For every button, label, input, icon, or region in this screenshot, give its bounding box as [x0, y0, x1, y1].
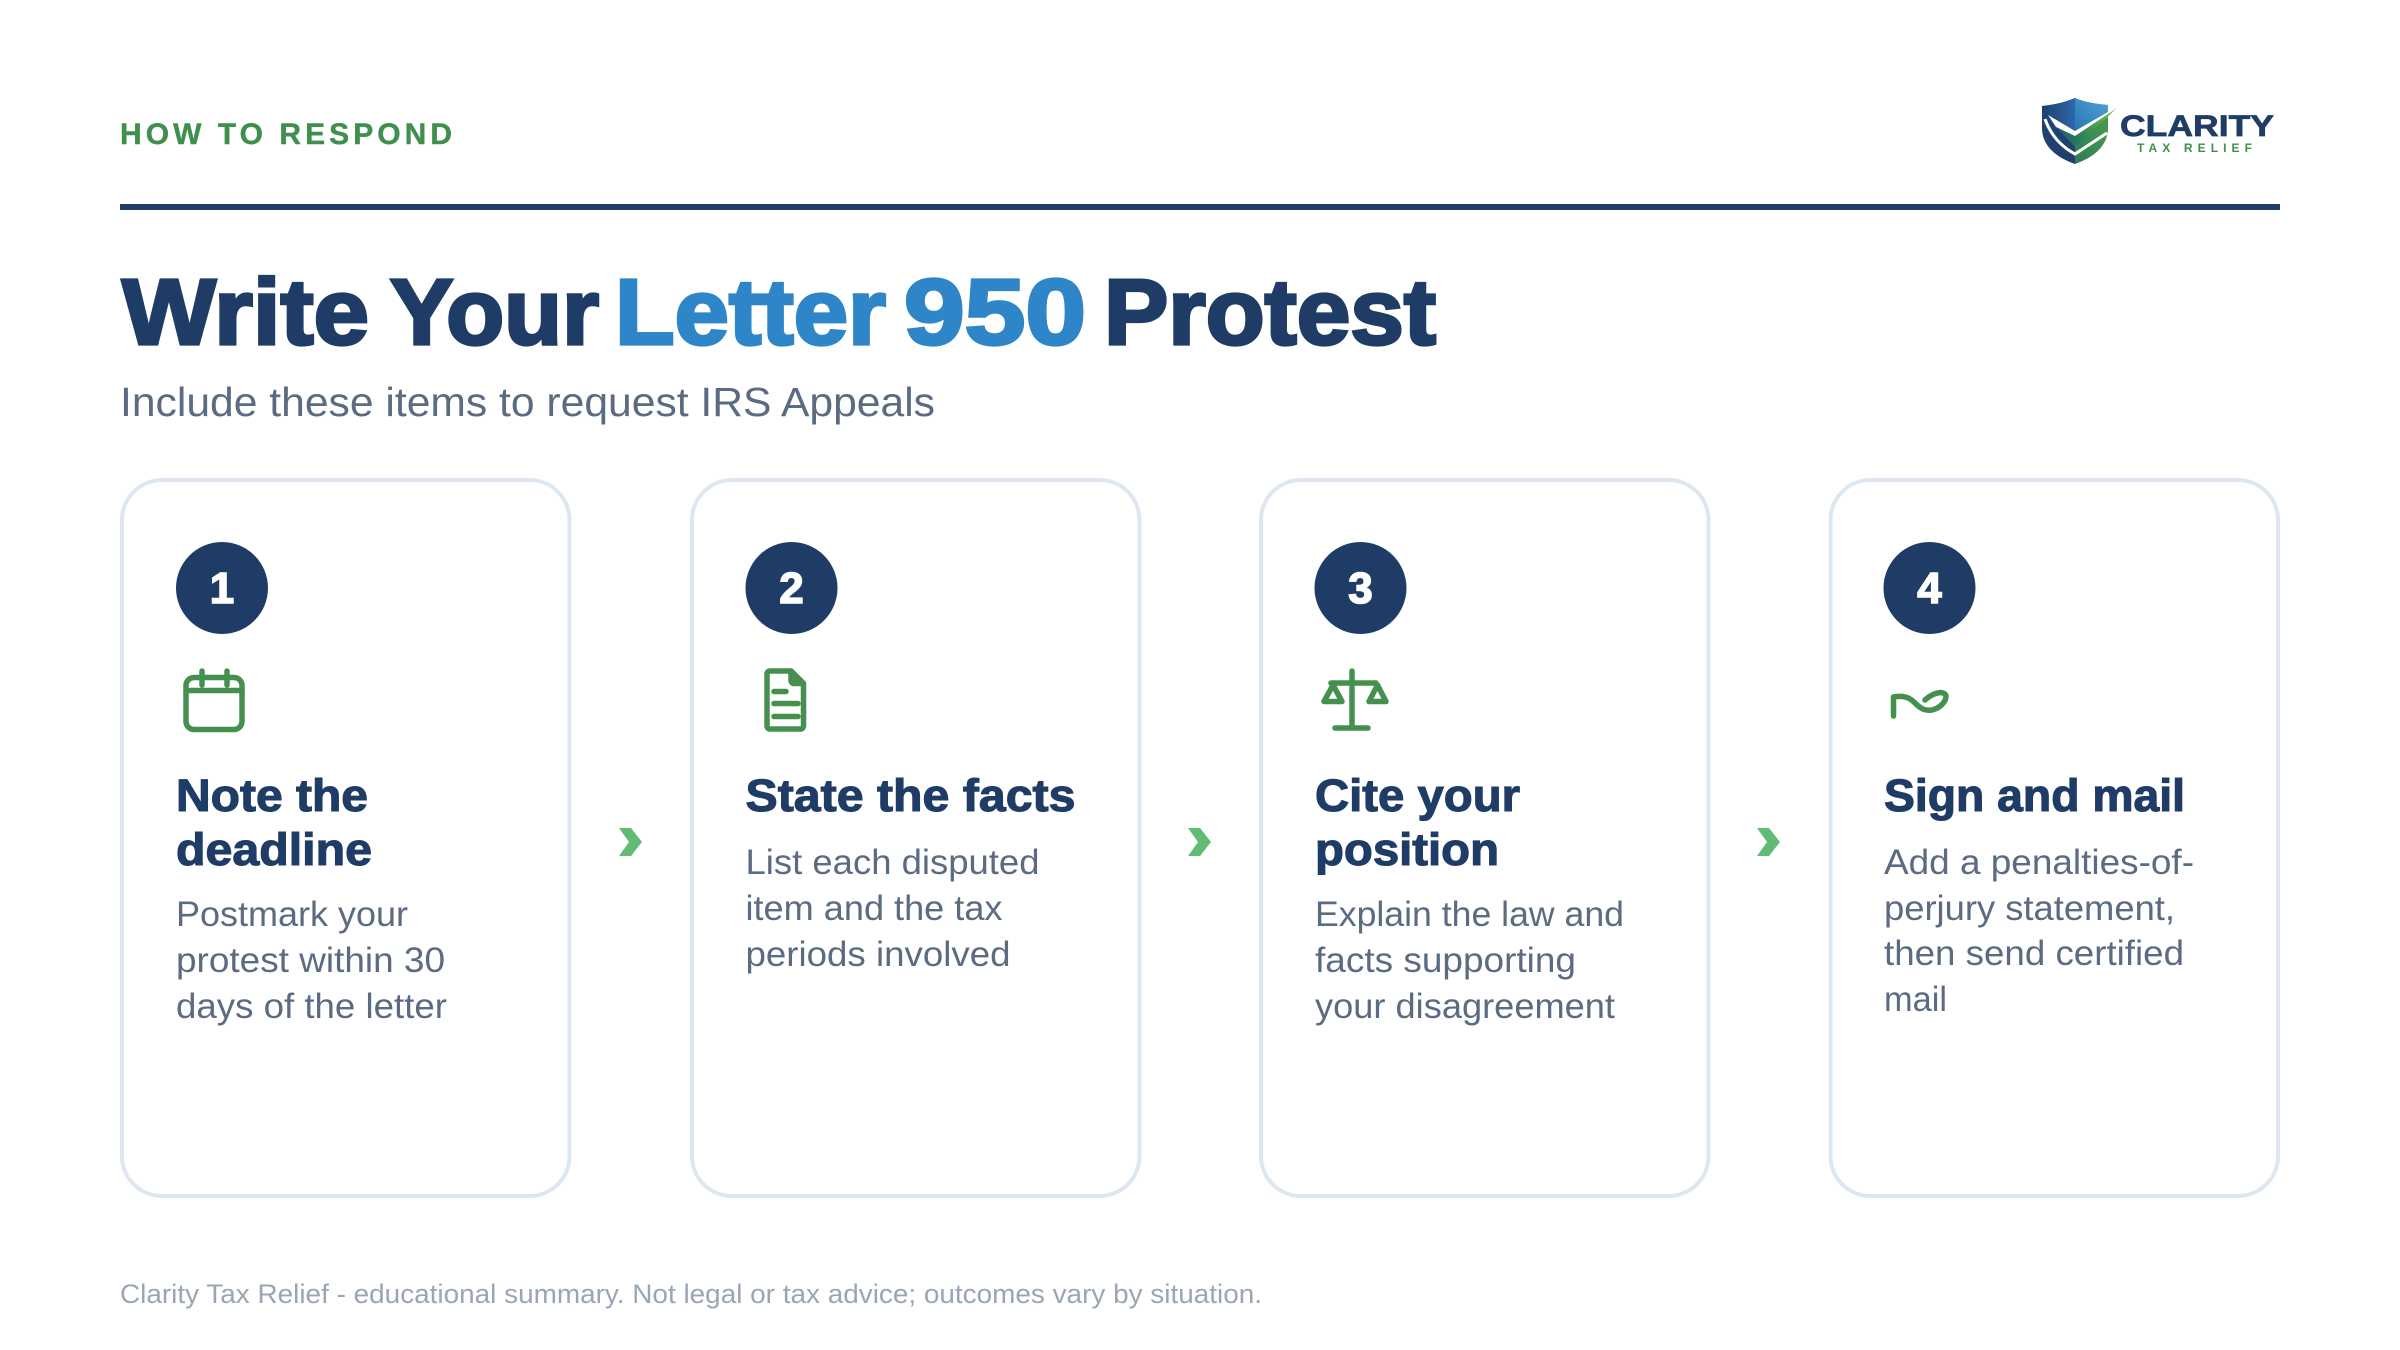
icon: scales	[1324, 671, 1386, 728]
body text: mail	[1884, 980, 1947, 1019]
step number 3: 3	[1348, 564, 1373, 613]
title: 950	[904, 260, 1086, 364]
title: Letter	[615, 260, 886, 364]
heading: note the deadline: deadline	[176, 824, 372, 875]
header rule	[120, 204, 2280, 210]
body text: Postmark your	[176, 895, 408, 934]
subtitle: Include these items to request IRS Appeals	[120, 379, 935, 425]
body text: days of the letter	[176, 987, 447, 1026]
body text	[1884, 843, 2194, 1019]
logo: Clarity Tax Relief	[2042, 98, 2274, 164]
arrow 1	[619, 828, 642, 856]
body text: Add a penalties-of-	[1884, 843, 2194, 882]
body text: then send certified	[1884, 934, 2184, 973]
arrow 3	[1757, 828, 1780, 856]
heading: cite your position	[1315, 770, 1520, 875]
panel: step 4 sign and mail	[1830, 480, 2278, 1196]
body text: your disagreement	[1315, 987, 1615, 1026]
eyebrow: how to respond: HOW TO RESPOND	[120, 118, 452, 151]
step number 3	[1314, 542, 1406, 634]
body text: item and the tax	[746, 889, 1003, 928]
body text: periods involved	[746, 935, 1010, 974]
step number 4: 4	[1917, 564, 1942, 613]
heading: sign and mail: Sign and mail	[1884, 770, 2185, 821]
logo: Clarity Tax Relief: CLARITY	[2120, 110, 2274, 143]
title: Write	[122, 260, 369, 364]
body text: List each disputed	[746, 843, 1040, 882]
arrow 2	[1188, 828, 1211, 856]
panel: step 3 cite your position	[1261, 480, 1708, 1196]
heading: cite your position: Cite your	[1315, 770, 1520, 821]
body text	[1315, 895, 1624, 1026]
icon: document	[767, 671, 804, 729]
step number 1	[176, 542, 268, 634]
icon: calendar	[186, 671, 242, 730]
step number 2: 2	[779, 564, 804, 613]
body text	[746, 843, 1040, 974]
logo: Clarity Tax Relief: TAX RELIEF	[2137, 141, 2252, 155]
body text	[176, 895, 447, 1026]
body text: facts supporting	[1315, 941, 1576, 980]
body text: protest within 30	[176, 941, 445, 980]
panel: step 1 note the deadline	[122, 480, 570, 1196]
title: Your	[390, 260, 599, 364]
step number 1: 1	[210, 564, 234, 613]
heading: note the deadline	[176, 770, 372, 875]
title: Protest	[1104, 260, 1436, 364]
step number 4	[1884, 542, 1976, 634]
heading: cite your position: position	[1315, 824, 1499, 875]
heading: state the facts: State the facts	[746, 770, 1076, 821]
footer disclaimer: Clarity Tax Relief - educational summary. Not legal or tax advice; outcomes vary by situation.	[120, 1279, 1262, 1309]
body text: Explain the law and	[1315, 895, 1624, 934]
heading: note the deadline: Note the	[176, 770, 368, 821]
panel: step 2 state the facts	[692, 480, 1140, 1196]
icon: signature	[1894, 693, 1946, 716]
body text: perjury statement,	[1884, 889, 2175, 928]
step number 2	[746, 542, 838, 634]
title	[122, 260, 1436, 364]
